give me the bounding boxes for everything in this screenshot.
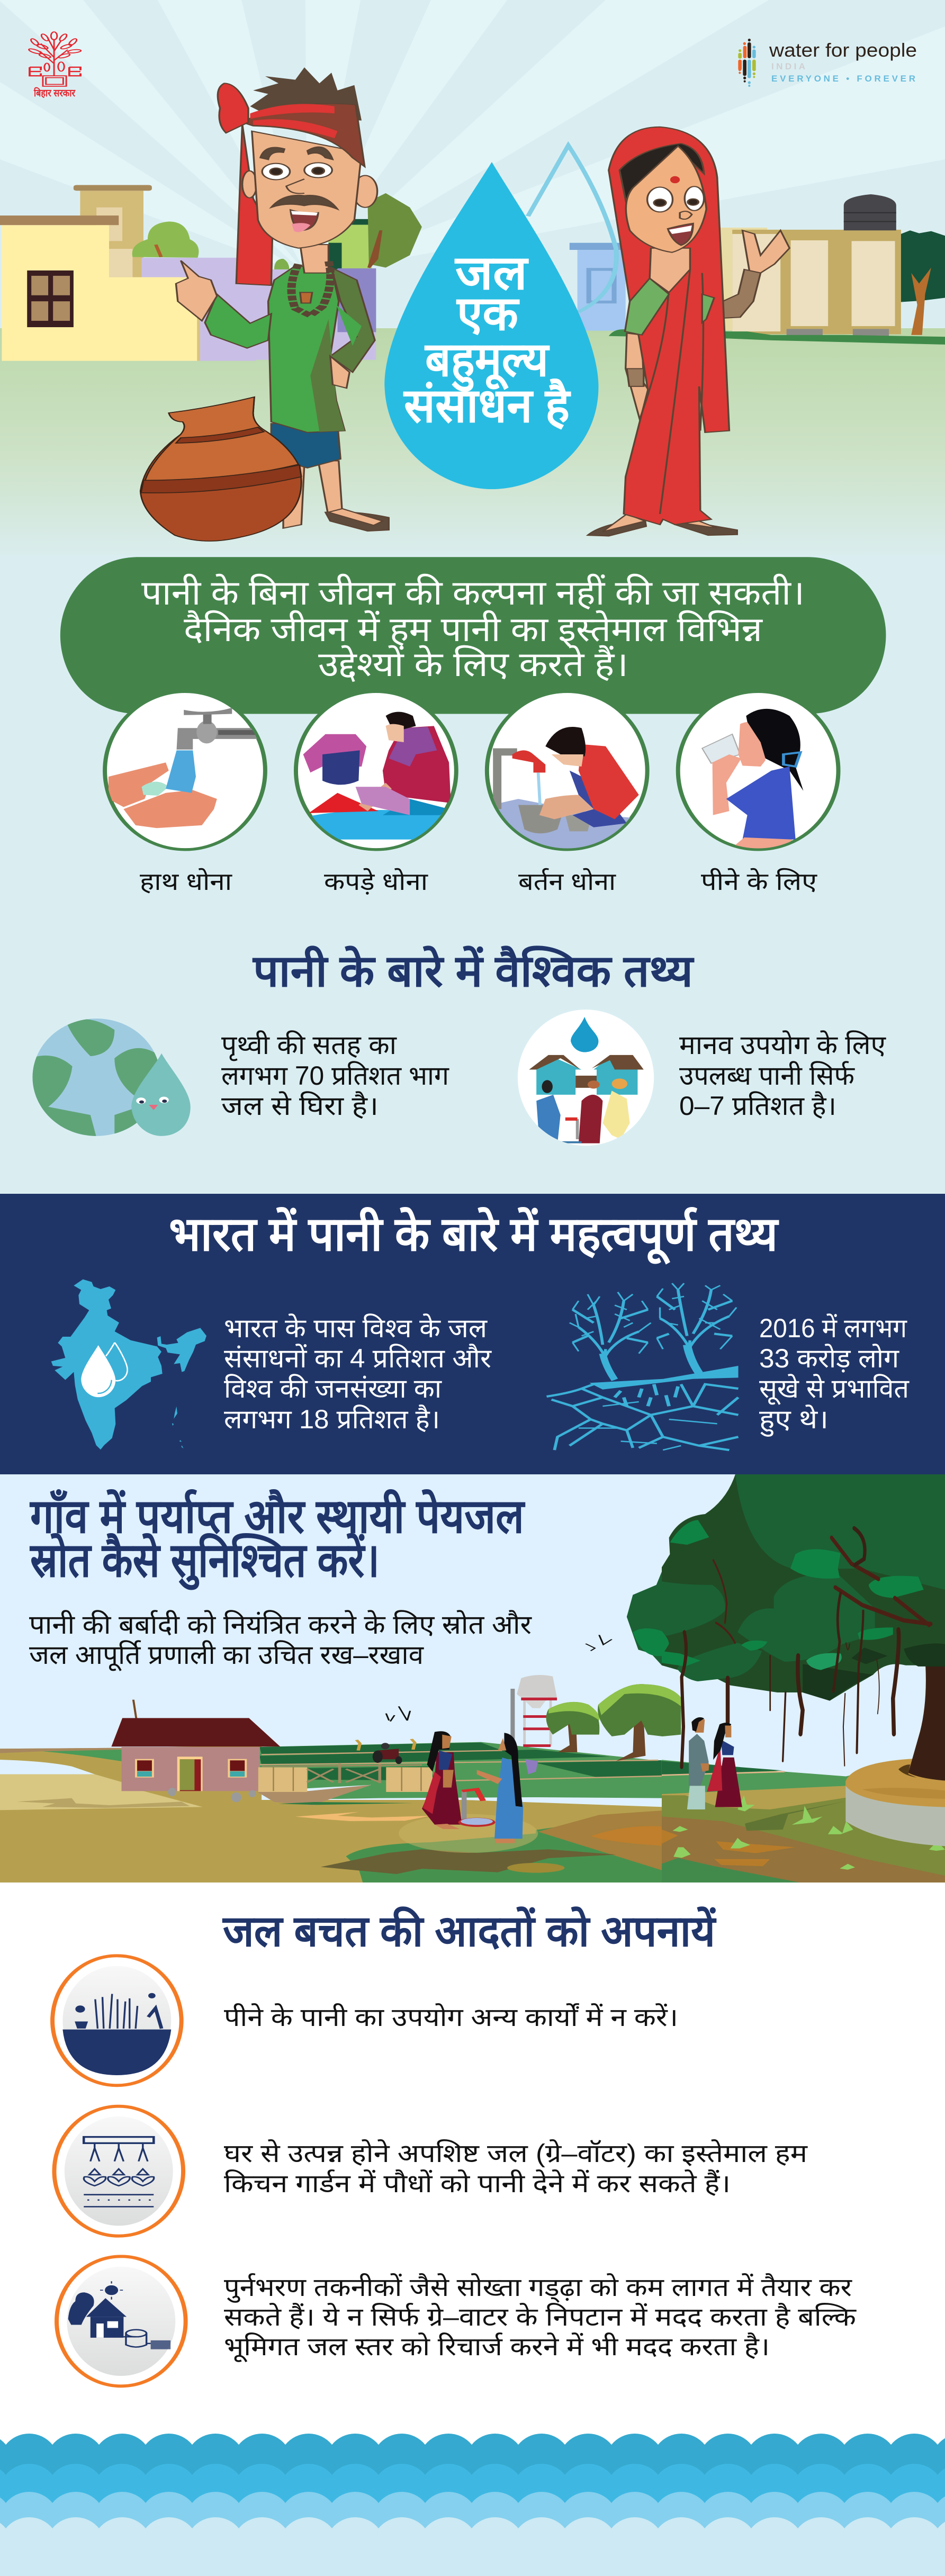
panel: light blue page background [0,0,945,1196]
grass tufts [672,1795,945,1870]
fact: earth surface: लगभग 70 प्रतिशत भाग [221,1061,449,1091]
fact: earth surface: जल से घिरा है। [221,1091,379,1121]
small tree [546,1702,599,1752]
fact: drought: 33 करोड़ लोग [759,1344,899,1373]
sunburst rays [0,0,945,275]
logo tagline: EVERYONE • FOREVER [771,74,915,84]
turban [242,104,365,167]
nose [286,179,304,193]
icon: irrigation [52,1956,182,2085]
raised hand [743,230,789,276]
activity labels [140,868,818,895]
logo mark [738,39,756,87]
turban tail [236,124,273,285]
drop title: एक [456,287,520,340]
fact: India share of water [224,1313,492,1434]
tree trunk [908,1665,945,1781]
logo: Bihar government [28,32,82,99]
right-hand buildings [720,194,945,336]
hip hand [330,356,349,388]
hens [168,1788,256,1802]
text: maintenance note: पानी की बर्बादी को नियंत्रित करने के लिए स्रोत और [29,1610,533,1640]
neck [300,245,328,273]
map of India with water drops [51,1280,206,1449]
panel: hero illustration [0,0,945,556]
mouth [668,223,693,245]
fact: drought: 2016 में लगभग [759,1313,907,1343]
left-hand yellow house with tower [0,185,256,361]
fact: drought [759,1313,910,1437]
heading: drinking water sources: स्रोत कैसे सुनिश्चित करें। [29,1533,380,1590]
clay pot [140,397,301,541]
eyes [262,164,290,179]
hair [250,67,362,121]
face [252,131,362,248]
Bihar government caption: बिहार सरकार [33,87,76,99]
icon: people at community tap [518,1010,654,1146]
habit one: पीने के पानी का उपयोग अन्य कार्यों में न करें। [224,2003,678,2032]
blouse [625,278,714,335]
icon: washing dishes [487,691,648,850]
saree fold lines [640,269,703,514]
right ground strip [662,1750,945,1885]
village background [0,146,945,361]
fact: usable water: मानव उपयोग के लिए [679,1030,886,1060]
left arm [626,333,656,429]
right sleeve [330,268,375,372]
panel: India facts [0,1194,945,1474]
platform [845,1759,945,1846]
woman in blue saree [477,1733,523,1843]
fact: drought: हुए थे। [759,1404,829,1437]
distant farmer [525,1759,538,1775]
legs and sandals [283,461,343,528]
icon: washing hands [105,691,265,850]
dirt path [257,1785,371,1805]
hedge [609,329,945,345]
shorts [271,424,340,468]
scene left part [0,1635,681,1883]
birds [386,1635,612,1722]
icon: earth and smiling droplet [30,1019,191,1137]
habit three: भूमिगत जल स्तर को रिचार्ज करने में भी मदद करता है। [224,2332,770,2363]
panel: water saving habits [0,1883,945,2576]
fact: usable water: उपलब्ध पानी सिर्फ [679,1061,855,1091]
fact: drought: सूखे से प्रभावित [759,1374,910,1405]
heading: India facts: भारत में पानी के बारे में महत्वपूर्ण तथ्य [169,1206,779,1265]
fact: India share of water: संसाधनों का 4 प्रतिशत और [224,1344,492,1373]
fact: India share of water: भारत के पास विश्व के जल [224,1313,488,1343]
hand pump tap [458,1789,496,1827]
text: maintenance note: जल आपूर्ति प्रणाली का उचित रख–रखाव [29,1640,424,1671]
panel: four water uses [105,691,839,850]
activity labels: हाथ धोना [140,868,232,895]
fact: earth surface [221,1030,449,1121]
house [111,1700,280,1791]
logo: Water for People [738,39,917,87]
habit three [224,2273,857,2363]
neck [650,248,690,292]
fact: usable water: 0–7 प्रतिशत है। [679,1091,836,1121]
hair [619,143,704,205]
tree right [657,1283,736,1373]
drop title: बहुमूल्य [424,334,550,392]
icon: washing clothes [295,691,458,850]
ears [242,171,257,198]
icon: drought trees on cracked earth [547,1283,739,1450]
character: man [176,67,389,531]
tractor [356,1739,415,1764]
heading: water saving habits: जल बचत की आदतों को अपनायें [222,1906,716,1956]
large tree [598,1684,681,1761]
necklace [291,260,330,316]
face [626,146,706,253]
drop title [403,247,571,433]
blue house and pale drop outline [528,146,626,331]
hay bales and fence [258,1764,433,1792]
left ground [0,1745,662,1883]
canopy [627,1474,945,1701]
icon: drinking water [678,691,839,850]
heading: drinking water sources: गाँव में पर्याप्त और स्थायी पेयजल [29,1489,526,1543]
activity labels: पीने के लिए [701,868,818,895]
water tower [510,1675,557,1747]
intro text: दैनिक जीवन में हम पानी का इस्तेमाल विभिन्न [184,610,763,648]
feet and sandals [588,519,646,536]
icon: sprinkler over plants [54,2106,183,2236]
right lower ground [346,1812,662,1883]
turban bow [218,83,248,133]
drop title: जल [454,247,529,300]
logo India: INDIA [771,61,805,71]
kurta side shading [310,319,345,432]
text: maintenance note [29,1610,533,1671]
eyes [647,187,672,212]
heading: global water facts: पानी के बारे में वैश्विक तथ्य [252,945,695,996]
icon: house with soak pit [57,2256,186,2386]
ground strip [589,1366,739,1390]
activity labels: बर्तन धोना [518,868,616,895]
green fields [257,1742,662,1799]
habit three: पुर्नभरण तकनीकों जैसे सोख्ता गड्ढ़ा को कम लागत में तैयार कर [224,2273,852,2303]
scene right part with banyan tree [627,1474,945,1885]
intro text: पानी के बिना जीवन की कल्पना नहीं की जा सकती। [141,573,805,612]
footer waves [0,2433,945,2576]
tree left [570,1292,651,1380]
cracked earth [547,1384,739,1450]
fact: India share of water: विश्व की जनसंख्या का [224,1374,442,1403]
panel: green intro banner [60,557,886,714]
habit two [224,2139,808,2198]
panel: village scene [0,1474,945,1885]
big water drop [384,162,598,489]
woman in red saree [422,1731,462,1829]
drop title: संसाधन है [403,378,571,433]
intro text: उद्देश्यों के लिए करते हैं। [318,645,628,683]
habit two: घर से उत्पन्न होने अपशिष्ट जल (ग्रे–वॉटर) का इस्तेमाल हम [224,2139,808,2168]
moustache [271,195,338,209]
heading: drinking water sources [29,1489,526,1590]
branches and aerial roots [682,1528,931,1767]
ground [0,328,945,556]
sky [0,1474,945,1885]
habit three: सकते हैं। ये न सिर्फ ग्रे–वाटर के निपटान में मदद करता है बल्कि [224,2302,857,2331]
fact: India share of water: लगभग 18 प्रतिशत है। [224,1404,440,1434]
couple [687,1717,742,1809]
bush [132,221,199,258]
eyebrows [260,147,332,159]
arm pointing up [205,294,271,348]
green house and tree behind man [253,193,422,360]
bindi [670,176,680,183]
fact: usable water [679,1030,886,1121]
kurta [268,266,345,433]
fact: earth surface: पृथ्वी की सतह का [221,1030,397,1061]
character: woman [588,127,789,536]
habit two: किचन गार्डन में पौधों को पानी देने में कर सकते हैं। [224,2169,731,2198]
activity labels: कपड़े धोना [324,868,428,895]
intro text [141,573,805,683]
logo wordmark: water for people [769,39,917,61]
saree head cover and body [609,127,729,525]
mouth [291,210,318,230]
